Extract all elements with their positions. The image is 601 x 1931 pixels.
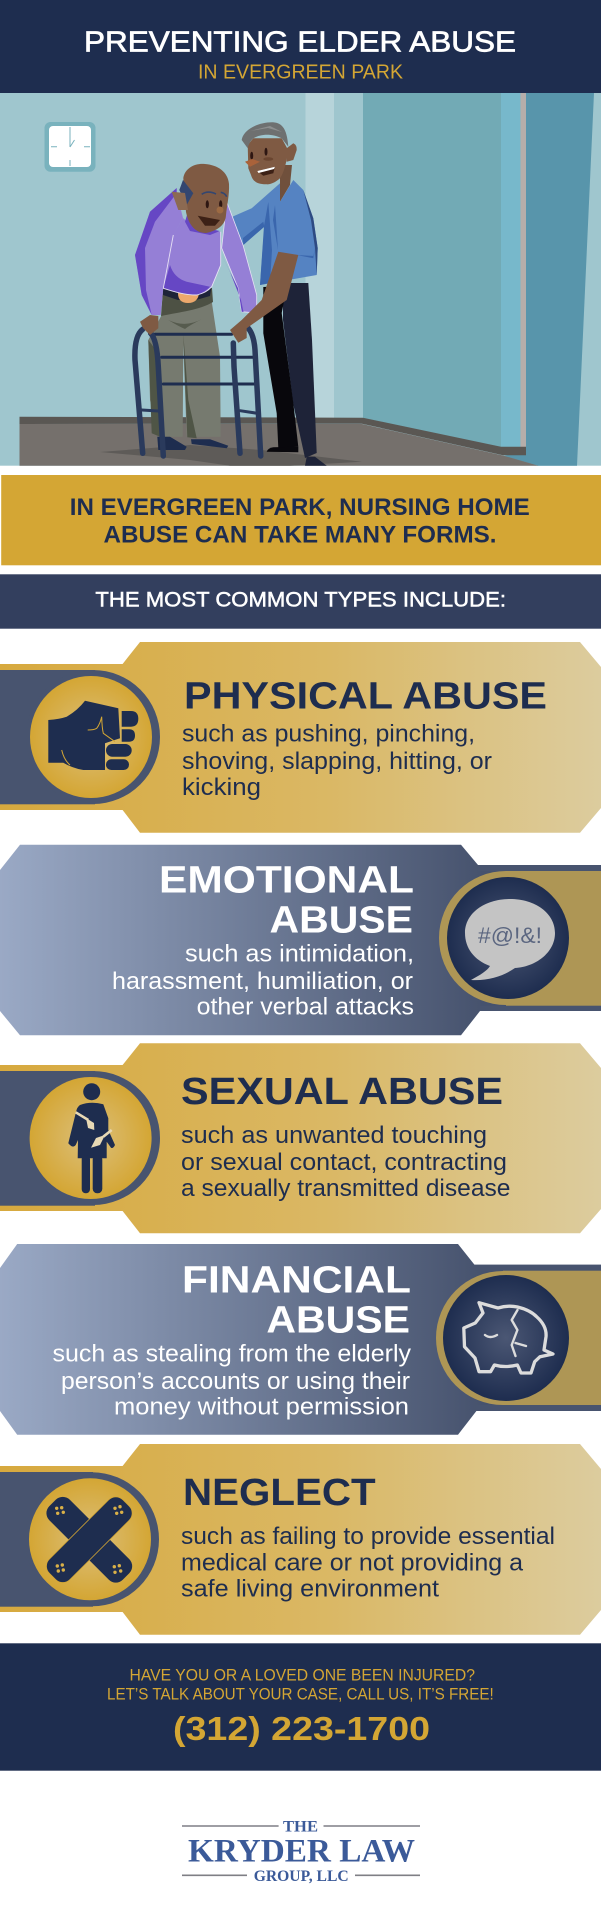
description: such as unwanted touching <box>181 1122 487 1149</box>
heading: PHYSICAL ABUSE <box>184 675 547 717</box>
panel: financial abuse <box>0 1244 601 1435</box>
icon: speech bubble <box>465 899 555 980</box>
logo: The Kryder Law Group <box>182 1819 420 1885</box>
banner: most common types <box>0 574 601 629</box>
heading: SEXUAL ABUSE <box>181 1071 503 1113</box>
subtitle: IN EVERGREEN PARK <box>198 61 404 83</box>
caregiver body <box>232 122 327 466</box>
icon: speech bubble: #@!&! <box>478 923 542 948</box>
panel: emotional abuse <box>0 845 601 1035</box>
description: money without permission <box>114 1394 409 1421</box>
icon: fist <box>48 701 138 770</box>
walker <box>135 328 261 456</box>
heading: ABUSE <box>270 900 413 942</box>
description: such as pushing, pinching, <box>182 721 475 748</box>
phone number: (312) 223-1700 <box>173 1710 430 1747</box>
panel: sexual abuse <box>0 1043 601 1233</box>
heading <box>159 860 414 942</box>
description: other verbal attacks <box>197 994 414 1021</box>
heading: NEGLECT <box>183 1472 376 1514</box>
logo: The Kryder Law Group: GROUP, LLC <box>254 1868 349 1885</box>
description: a sexually transmitted disease <box>181 1175 510 1202</box>
description: such as stealing from the elderly <box>52 1341 412 1368</box>
panel: neglect <box>0 1444 601 1635</box>
heading: FINANCIAL <box>182 1260 411 1302</box>
description: shoving, slapping, hitting, or <box>182 748 492 775</box>
description: medical care or not providing a <box>181 1550 523 1577</box>
hands on walker <box>140 252 298 343</box>
description: such as intimidation, <box>185 941 414 968</box>
description <box>182 721 492 801</box>
logo: The Kryder Law Group: THE <box>283 1819 318 1836</box>
banner: most common types: THE MOST COMMON TYPES INCLUDE: <box>95 589 506 612</box>
elder man <box>135 164 257 450</box>
icon: crossed bandages <box>42 1493 136 1587</box>
heading: EMOTIONAL <box>159 860 414 902</box>
heading <box>182 1260 411 1342</box>
footer call to action <box>0 1643 601 1771</box>
banner: nursing home abuse <box>1 475 601 565</box>
description <box>52 1341 412 1421</box>
footer call to action: HAVE YOU OR A LOVED ONE BEEN INJURED? <box>130 1667 475 1685</box>
header <box>0 0 601 93</box>
description <box>181 1523 555 1603</box>
panel: physical abuse <box>0 642 601 833</box>
icon: cracked piggy bank <box>464 1303 553 1373</box>
description: or sexual contact, contracting <box>181 1149 507 1176</box>
icon: wall clock <box>44 122 96 172</box>
description <box>181 1122 510 1202</box>
description: person’s accounts or using their <box>61 1368 410 1395</box>
description: such as failing to provide essential <box>181 1523 555 1550</box>
heading: ABUSE <box>266 1300 410 1342</box>
logo: The Kryder Law Group: KRYDER LAW <box>188 1834 415 1870</box>
illustration: room with caregiver and elder using walker <box>0 93 601 466</box>
description: safe living environment <box>181 1576 439 1603</box>
banner: nursing home abuse: ABUSE CAN TAKE MANY FORMS. <box>104 523 496 549</box>
description <box>112 941 414 1021</box>
banner: nursing home abuse: IN EVERGREEN PARK, NURSING HOME <box>70 495 530 521</box>
description: kicking <box>182 774 261 801</box>
description: harassment, humiliation, or <box>112 968 413 995</box>
footer call to action: LET’S TALK ABOUT YOUR CASE, CALL US, IT’S FREE! <box>107 1685 494 1703</box>
title: PREVENTING ELDER ABUSE <box>84 27 516 59</box>
icon: figure with unwanted hands <box>68 1083 115 1193</box>
